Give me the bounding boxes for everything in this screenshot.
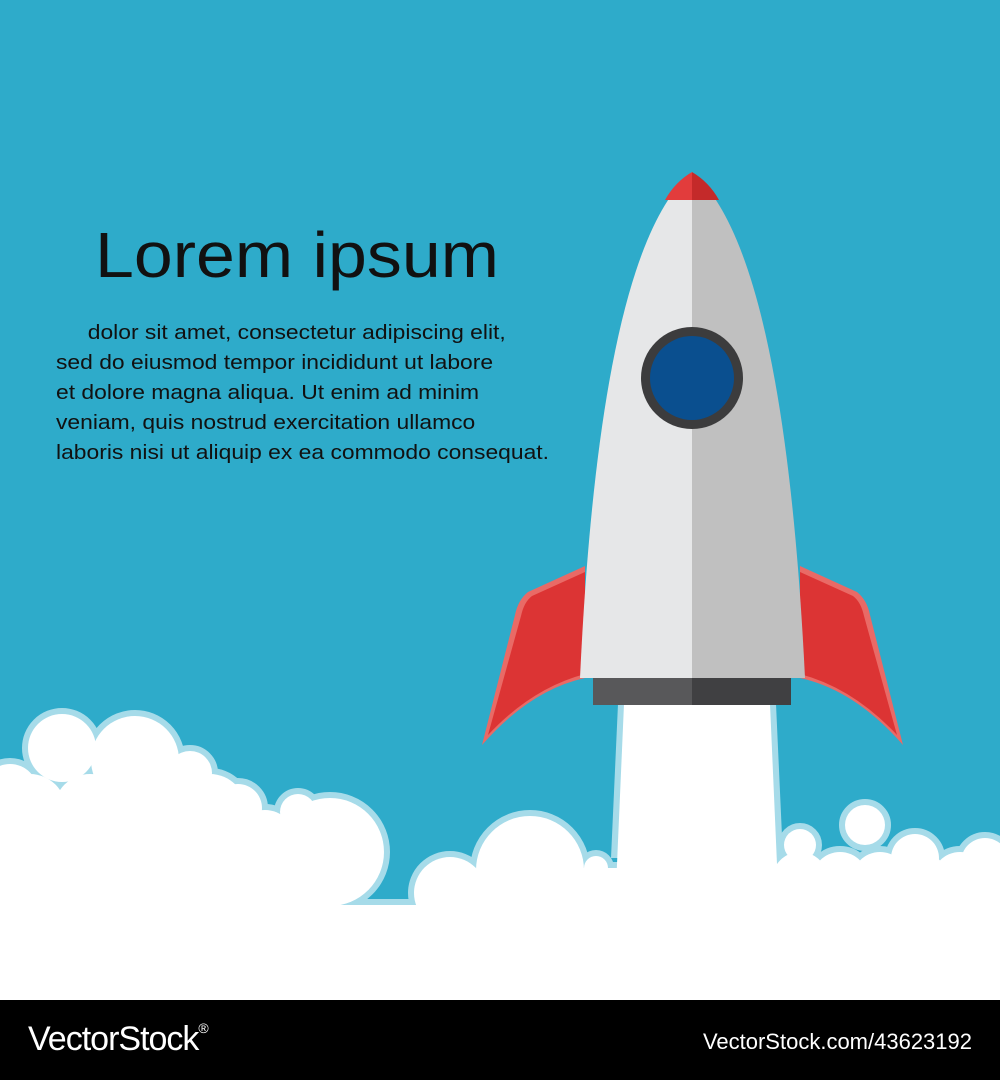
body text: laboris nisi ut aliquip ex ea commodo consequat. xyxy=(56,441,549,464)
title: Lorem ipsum xyxy=(95,219,499,291)
watermark url: VectorStock.com/43623192 xyxy=(703,1029,972,1054)
footer bar xyxy=(0,1000,1000,1080)
rocket xyxy=(482,172,903,745)
body text: et dolore magna aliqua. Ut enim ad minim xyxy=(56,381,479,404)
exhaust xyxy=(611,704,783,910)
body text xyxy=(56,321,549,464)
body text: veniam, quis nostrud exercitation ullamco xyxy=(56,411,475,434)
body text: dolor sit amet, consectetur adipiscing elit, xyxy=(88,321,506,344)
body text: sed do eiusmod tempor incididunt ut labore xyxy=(56,351,493,374)
watermark logo: VectorStock® xyxy=(28,1020,208,1058)
clouds xyxy=(0,714,1000,1000)
